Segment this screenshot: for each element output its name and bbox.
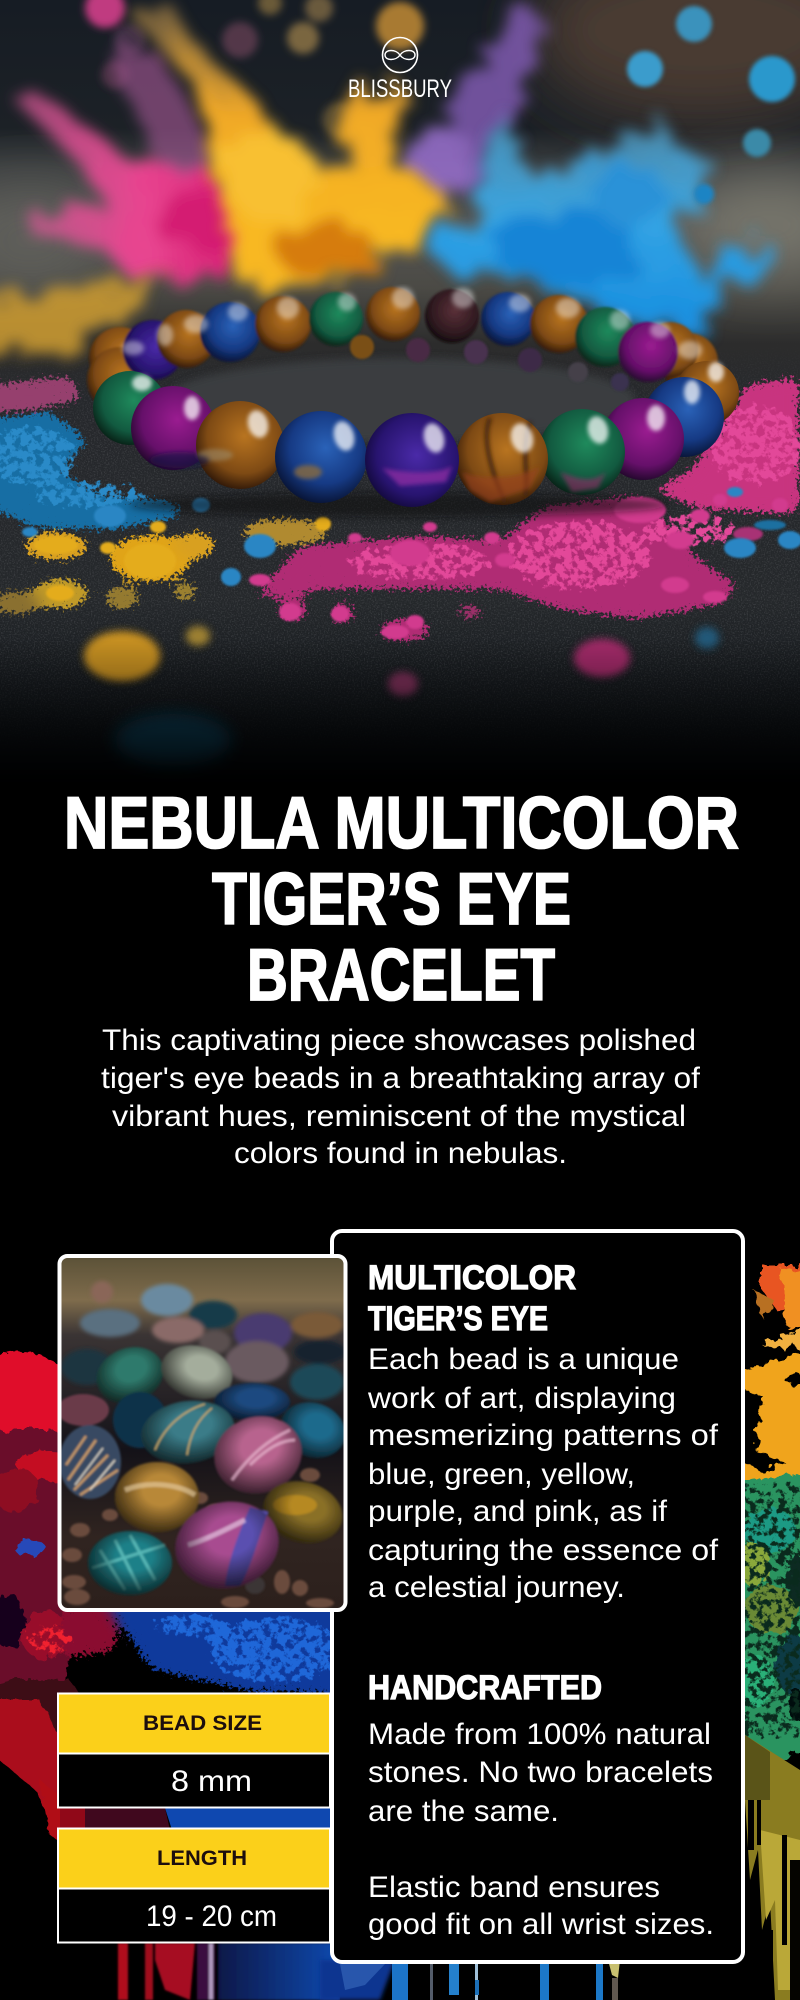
spec table: length bbox=[58, 1828, 330, 1942]
powder explosion: blue bbox=[420, 105, 775, 330]
photo: polished stones bbox=[57, 1256, 353, 1610]
bokeh lights bbox=[85, 0, 424, 138]
text: multicolor description: blue, green, yellow, bbox=[368, 1458, 635, 1491]
text: multicolor description: purple, and pink, as if bbox=[368, 1495, 668, 1528]
heading: multicolor tiger's eye: MULTICOLOR bbox=[368, 1259, 576, 1297]
text: multicolor description bbox=[367, 1343, 719, 1604]
bracelet: back beads bbox=[87, 287, 718, 413]
text: multicolor description: Each bead is a unique bbox=[368, 1343, 679, 1376]
stone surface texture bbox=[0, 368, 800, 709]
powder explosion: pink bbox=[10, 45, 260, 280]
spec table: bead size: 8 mm bbox=[171, 1765, 252, 1798]
powder: blue crumbs bbox=[22, 487, 800, 586]
pebbles bbox=[62, 1468, 334, 1608]
text: handcrafted description: stones. No two bracelets bbox=[368, 1756, 713, 1789]
logo: Blissbury bbox=[348, 38, 452, 103]
powder: blue dust, left bbox=[0, 410, 190, 530]
powder explosion: purple bbox=[406, 10, 545, 196]
intro paragraph: This captivating piece showcases polished bbox=[102, 1024, 696, 1057]
text: multicolor description: work of art, displaying bbox=[367, 1382, 676, 1415]
powder: yellow dust bbox=[0, 518, 331, 615]
title: TIGER’S EYE bbox=[212, 859, 571, 940]
text: handcrafted description: Made from 100% natural bbox=[368, 1718, 711, 1751]
text: handcrafted description bbox=[368, 1718, 714, 1941]
spec table: length: 19 - 20 cm bbox=[146, 1900, 277, 1933]
heading: multicolor tiger's eye bbox=[368, 1259, 576, 1338]
paint splash: red and blue, left bbox=[0, 1351, 345, 2000]
heading: handcrafted: HANDCRAFTED bbox=[368, 1669, 602, 1707]
powder: crisp crumbs bbox=[249, 494, 788, 639]
intro paragraph bbox=[101, 1024, 701, 1170]
stones bbox=[57, 1338, 353, 1598]
title bbox=[64, 783, 739, 1016]
intro paragraph: vibrant hues, reminiscent of the mystical bbox=[112, 1100, 686, 1133]
paint drips under the spec table bbox=[118, 1943, 340, 2000]
bracelet: front beads bbox=[93, 361, 739, 517]
title: BRACELET bbox=[247, 935, 555, 1016]
powder explosion: yellow bbox=[0, 0, 445, 357]
inner ring stone bbox=[165, 358, 635, 442]
paint splash: bottom blue drips bbox=[320, 1960, 620, 2000]
text: handcrafted description: good fit on all wrist sizes. bbox=[368, 1908, 714, 1941]
blurred distant stones bbox=[61, 1281, 346, 1400]
hero photo: bracelet on coloured powder bbox=[0, 0, 800, 802]
spec table: bead size bbox=[58, 1694, 330, 1808]
paint splash: orange, green and yellow, right bbox=[745, 1263, 800, 2000]
text: multicolor description: mesmerizing patterns of bbox=[368, 1419, 719, 1452]
fade into black bbox=[0, 640, 800, 802]
heading: multicolor tiger's eye: TIGER’S EYE bbox=[368, 1300, 548, 1338]
spec table: length: LENGTH bbox=[157, 1847, 247, 1870]
text: handcrafted description: Elastic band ensures bbox=[368, 1871, 660, 1904]
intro paragraph: tiger's eye beads in a breathtaking array of bbox=[101, 1062, 701, 1095]
bead highlights bbox=[132, 362, 724, 455]
logo: Blissbury: BLISSBURY bbox=[348, 75, 452, 103]
panel: product details bbox=[332, 1231, 743, 1962]
text: multicolor description: a celestial journey. bbox=[368, 1571, 625, 1604]
blurred foreground powder bbox=[84, 626, 719, 696]
intro paragraph: colors found in nebulas. bbox=[234, 1137, 567, 1170]
powder: pink dust, left and right bbox=[0, 375, 800, 642]
text: multicolor description: capturing the essence of bbox=[368, 1534, 719, 1567]
bead patterns bbox=[150, 418, 606, 503]
spec table: bead size: BEAD SIZE bbox=[143, 1712, 262, 1735]
text: handcrafted description: are the same. bbox=[368, 1795, 559, 1828]
